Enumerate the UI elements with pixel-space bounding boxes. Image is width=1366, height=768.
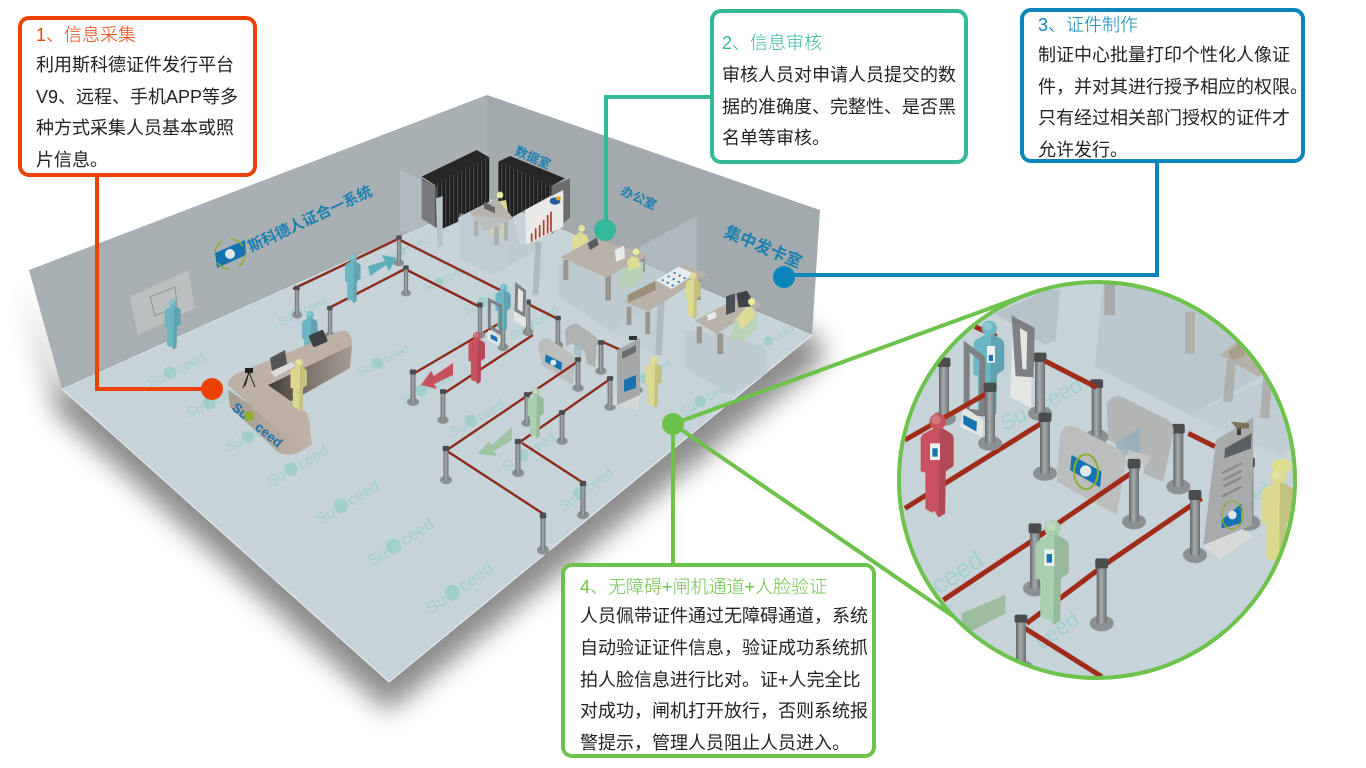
wall picture — [130, 270, 195, 335]
floor watermarks: Su ceed — [555, 465, 616, 514]
office desk and staff — [560, 225, 649, 301]
floor watermarks: Su ceed — [447, 396, 507, 440]
room label: data room: 数据室 — [513, 143, 553, 172]
glass partitions — [459, 213, 767, 395]
zoom: kiosk — [1203, 417, 1253, 559]
zoom: front stanchions with belts — [905, 383, 1057, 508]
floor watermarks: Su ceed — [364, 514, 437, 570]
turnstile front panel — [538, 338, 575, 385]
connector: step 2 — [594, 97, 712, 241]
floor watermarks: Su ceed — [499, 430, 558, 475]
zoom: front belts — [943, 468, 1202, 677]
zoom: gate posts — [960, 318, 1032, 437]
kiosk — [612, 336, 640, 410]
left wall — [29, 95, 487, 389]
zoom: arrow — [962, 595, 1006, 635]
floor watermarks: Su ceed — [264, 442, 331, 490]
floor watermarks: Su ceed — [422, 558, 497, 618]
direction arrows — [368, 255, 397, 276]
zoom: partitions — [996, 284, 1272, 419]
text: step 4: 警提示，管理人员阻止人员进入。 — [580, 733, 850, 753]
counter logo: Suceed — [229, 400, 285, 451]
text: step 3: 制证中心批量打印个性化人像证 — [1038, 45, 1290, 65]
back rooms — [400, 150, 767, 395]
text: step 2: 名单等审核。 — [722, 128, 830, 148]
zoom: guard — [1262, 459, 1294, 566]
turnstile rear panel — [565, 323, 598, 367]
floor watermarks: Su ceed — [184, 380, 247, 421]
text: step 3 — [1038, 45, 1308, 160]
security detection posts — [487, 283, 527, 347]
text: step 1: 利用斯科德证件发行平台 — [36, 55, 234, 75]
zoom: turnstile rear — [1107, 396, 1173, 482]
heading: step 4: 4、无障碍+闸机通道+人脸验证 — [580, 577, 827, 597]
connector: step 1 — [97, 172, 223, 400]
heading: step 1: 1、信息采集 — [36, 24, 136, 44]
floor — [62, 198, 812, 682]
floor watermarks: Su ceed — [144, 349, 208, 391]
text: step 1: V9、远程、手机APP等多 — [36, 87, 238, 107]
floor watermarks: Su ceed — [383, 235, 430, 265]
callout: step 2 — [710, 9, 968, 164]
text: step 1 — [36, 55, 238, 170]
issuing desk — [695, 291, 763, 354]
zoom: watermarks: ceed — [1030, 606, 1084, 654]
text: step 3: 允许发行。 — [1038, 140, 1128, 160]
floor watermarks — [144, 234, 796, 618]
illustration: personnel verification hall — [24, 95, 1297, 723]
floor watermarks: Su ceed — [507, 303, 561, 343]
text: step 4: 拍人脸信息进行比对。证+人完全比 — [580, 670, 861, 690]
zoom: green visitor — [1035, 520, 1069, 625]
floor watermarks: Su ceed — [398, 368, 456, 408]
zoom: turnstile front — [1057, 426, 1126, 515]
text: step 3: 件，并对其进行授予相应的权限。 — [1038, 77, 1308, 97]
wall logo — [215, 239, 246, 269]
heading: step 3: 3、证件制作 — [1038, 15, 1138, 35]
floor watermarks: Su ceed — [625, 358, 674, 395]
callout: step 3 — [1020, 8, 1305, 163]
text: step 2 — [722, 65, 956, 148]
zoom: red visitor — [921, 414, 954, 518]
zoom: watermarks — [918, 353, 1274, 654]
data room desk — [470, 192, 513, 245]
zoom: belts rear — [975, 327, 1215, 447]
floor watermarks: Su ceed — [313, 477, 383, 528]
queue stanchions and belts — [292, 235, 625, 394]
chart poster — [525, 190, 563, 245]
callout: step 1 — [18, 16, 257, 177]
data room racks — [400, 150, 570, 248]
floor watermarks: Su ceed — [463, 283, 512, 318]
text: step 4: 人员佩带证件通过无障碍通道，系统 — [580, 606, 868, 626]
zoom: watermarks: Suceed — [996, 372, 1086, 436]
text: step 2: 据的准确度、完整性、是否黑 — [722, 97, 956, 117]
floor watermarks: Su ceed — [275, 292, 330, 329]
magnified detail circle — [899, 280, 1298, 678]
wall heading: 斯科德人证合一系统 — [245, 182, 375, 256]
heading: step 2: 2、信息审核 — [722, 33, 822, 53]
floor watermarks: Su ceed — [677, 377, 735, 420]
staff and visitors — [165, 299, 181, 350]
queue front — [165, 254, 662, 555]
floor watermarks: Su ceed — [355, 342, 412, 380]
room shadow — [26, 285, 826, 712]
zoom: watermarks: ucc — [918, 353, 950, 383]
zoom: watermarks: ceed — [925, 544, 989, 600]
floor watermarks: Su ceed — [751, 323, 796, 356]
room label: office: 办公室 — [619, 183, 659, 213]
card table — [623, 264, 707, 334]
room — [29, 95, 820, 682]
text: step 4 — [580, 606, 868, 753]
text: step 1: 种方式采集人员基本或照 — [36, 118, 234, 138]
reception counter — [228, 311, 352, 455]
text: step 3: 只有经过相关部门授权的证件才 — [1038, 108, 1290, 128]
right wall — [487, 95, 820, 335]
zoom: watermarks: eed — [1240, 479, 1274, 510]
floor watermarks: Su ceed — [421, 265, 467, 296]
connector: step 3 — [773, 160, 1157, 288]
connector dot: step 4 — [662, 413, 684, 435]
text: step 4: 对成功，闸机打开放行，否则系统报 — [580, 701, 868, 721]
zoom: rear stanchions — [932, 353, 1260, 531]
text: step 4: 自动验证证件信息，验证成功系统抓 — [580, 638, 868, 658]
text: step 1: 片信息。 — [36, 150, 108, 170]
connector: green — [673, 290, 1040, 621]
room label: card centre: 集中发卡室 — [721, 221, 805, 272]
text: step 2: 审核人员对申请人员提交的数 — [722, 65, 956, 85]
floor watermarks: Su ceed — [223, 414, 286, 455]
security gate and turnstile — [487, 283, 598, 385]
callout: step 4 — [561, 563, 876, 758]
